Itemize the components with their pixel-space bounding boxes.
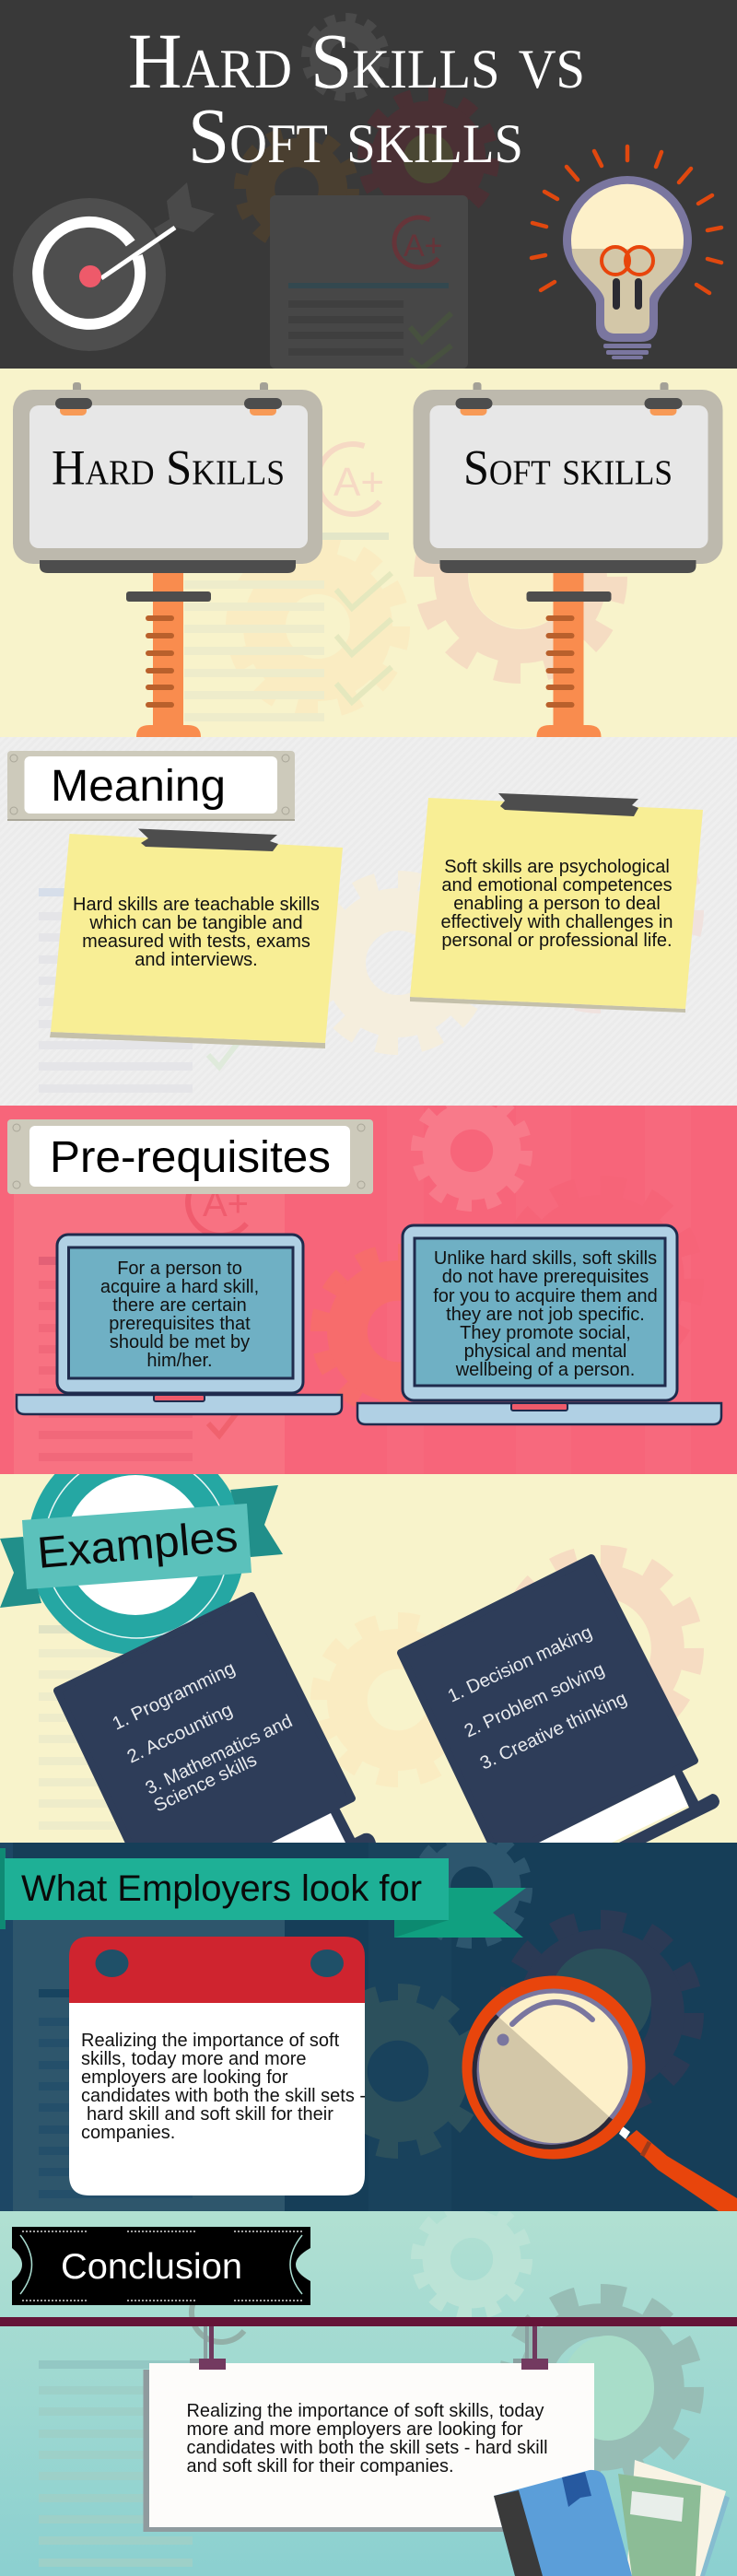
billboard: hard skills: Hard Skills (52, 440, 285, 496)
billboard: soft skills: Soft skills (463, 440, 673, 496)
laptop: soft skills: Unlike hard skills, soft skills (434, 1248, 657, 1269)
book: hard skill examples: 3. Mathematics and (143, 1711, 296, 1799)
icon: light bulb (532, 146, 721, 359)
book: hard skill examples: 2. Accounting (124, 1700, 236, 1768)
laptop: soft skills: wellbeing of a person. (455, 1360, 635, 1380)
hanging note: more and more employers are looking for (186, 2419, 523, 2440)
panel: header (0, 0, 737, 369)
sticky note: soft skills: personal or professional life. (441, 931, 673, 951)
laptop: hard skills: For a person to (117, 1259, 242, 1279)
watermark: gears and document (0, 1833, 694, 2211)
sticky note: hard skills: which can be tangible and (88, 913, 303, 933)
calendar card: employers are looking for (81, 2067, 288, 2088)
sticky note: soft skills: and emotional competences (441, 875, 673, 896)
heading: ribbon (0, 1848, 526, 1938)
panel: billboards (0, 369, 737, 737)
sticky note: soft skills: Soft skills are psychological (444, 857, 670, 877)
laptop: soft skills: physical and mental (464, 1341, 626, 1362)
laptop: soft skills (357, 1225, 721, 1424)
heading: conclusion ticket: Conclusion (61, 2247, 242, 2287)
calendar card: Realizing the importance of soft (81, 2031, 340, 2051)
hanging note: Realizing the importance of soft skills, today (186, 2401, 544, 2421)
laptop: soft skills: They promote social, (460, 1323, 631, 1343)
panel: conclusion (0, 2211, 737, 2576)
sticky note: hard skills: measured with tests, exams (82, 931, 310, 952)
book: soft skill examples: 2. Problem solving (462, 1659, 608, 1742)
icon: target with arrow (13, 182, 215, 351)
billboard: soft skills (413, 382, 722, 737)
heading: pre-requisites (7, 1119, 373, 1194)
hanging note: candidates with both the skill sets - hard skill (186, 2438, 547, 2458)
watermark: gears and document: A+ (404, 228, 443, 263)
hanging note (144, 2326, 594, 2532)
heading: pre-requisites: Pre-requisites (50, 1133, 331, 1182)
hanging note: and soft skill for their companies. (186, 2456, 453, 2476)
watermark: gears and document: A+ (203, 1184, 249, 1224)
sticky note: soft skills: enabling a person to deal (453, 894, 661, 914)
title: Soft skills (188, 91, 523, 180)
laptop: hard skills (17, 1235, 342, 1414)
sticky note: hard skills: and interviews. (135, 950, 258, 970)
heading: examples ribbon (0, 1485, 283, 1608)
watermark: gears and document (14, 1096, 694, 1474)
heading: examples ribbon: Examples (35, 1512, 240, 1578)
icon: magnifying glass (462, 1975, 737, 2211)
heading: conclusion ticket (12, 2227, 310, 2305)
laptop: soft skills: they are not job specific. (446, 1305, 645, 1325)
heading: ribbon: What Employers look for (21, 1868, 422, 1909)
calendar card: skills, today more and more (81, 2049, 307, 2069)
laptop: soft skills: for you to acquire them and (433, 1286, 658, 1306)
panel: examples (0, 1474, 737, 1843)
book: soft skill examples (401, 1558, 719, 1843)
book: hard skill examples: Science skills (151, 1750, 260, 1817)
watermark: gears and document (184, 429, 616, 721)
watermark: gears and document (39, 1555, 694, 1830)
billboard: hard skills (13, 382, 322, 737)
icon: books (494, 2460, 730, 2576)
laptop: hard skills: there are certain (112, 1295, 247, 1316)
book: soft skill examples: 3. Creative thinking (477, 1688, 630, 1774)
calendar card: hard skill and soft skill for their (87, 2104, 333, 2125)
heading: meaning (7, 751, 295, 821)
hanging rail (0, 2317, 737, 2326)
watermark: gears and document (39, 817, 694, 1093)
calendar card (69, 1937, 366, 2195)
book: hard skill examples: 1. Programming (110, 1658, 239, 1735)
title: Hard Skills vs (128, 17, 585, 105)
laptop: hard skills: acquire a hard skill, (100, 1277, 259, 1297)
watermark: gears and document: A+ (333, 460, 384, 505)
title (128, 17, 585, 180)
laptop: hard skills: prerequisites that (109, 1314, 251, 1334)
laptop: hard skills: should be met by (110, 1332, 250, 1352)
panel: what employers look for (0, 1843, 737, 2211)
badge: teal circle (28, 1437, 245, 1655)
laptop: soft skills: do not have prerequisites (442, 1267, 649, 1287)
panel: pre-requisites (0, 1106, 737, 1474)
calendar card: candidates with both the skill sets - (81, 2086, 366, 2106)
watermark: gears and document (39, 2205, 694, 2567)
panel: meaning (0, 737, 737, 1106)
heading: meaning: Meaning (51, 762, 226, 811)
sticky note: hard skills (50, 829, 343, 1048)
sticky note: soft skills (410, 793, 703, 1013)
sticky note: soft skills: effectively with challenges in (440, 912, 673, 932)
sticky note: hard skills: Hard skills are teachable skills (73, 895, 320, 915)
calendar card: companies. (81, 2123, 175, 2143)
watermark: gears and document (240, 18, 492, 369)
laptop: hard skills: him/her. (146, 1351, 213, 1371)
book: hard skill examples (57, 1596, 376, 1843)
book: soft skill examples: 1. Decision making (445, 1622, 595, 1707)
